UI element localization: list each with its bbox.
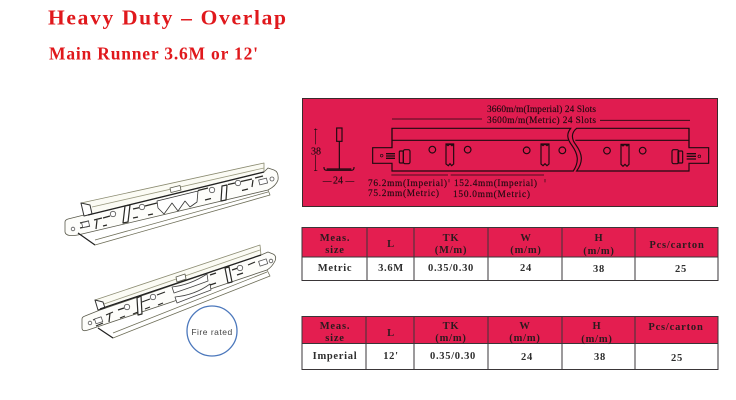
dimension labels: 152.4mm(Imperial) — [454, 178, 537, 189]
table: imperial: 25 — [671, 353, 683, 364]
table: metric: 24 — [520, 263, 532, 274]
icon: runner cross section — [314, 128, 354, 182]
rail — [81, 163, 264, 215]
fire rated badge — [187, 306, 237, 356]
table: metric: Metric — [318, 263, 352, 274]
table: imperial: (m/m) — [509, 333, 541, 344]
table: metric: 0.35/0.30 — [428, 263, 474, 274]
slots and holes — [93, 262, 255, 326]
table: metric: size — [325, 245, 345, 256]
table: imperial: TK — [443, 321, 459, 332]
table: imperial: Imperial — [313, 351, 357, 362]
dimension arrows — [391, 119, 690, 182]
table: imperial: 38 — [594, 352, 606, 363]
table: metric: L — [387, 239, 395, 250]
table: imperial: (m/m) — [435, 333, 467, 344]
table: metric: (m/m) — [510, 245, 542, 256]
table: imperial: Pcs/carton — [648, 322, 704, 333]
table: metric: (m/m) — [583, 246, 615, 257]
dimension labels — [311, 104, 596, 200]
flange — [78, 190, 270, 245]
table: imperial: (m/m) — [581, 334, 613, 345]
table: imperial: Meas. — [320, 321, 350, 332]
table: imperial: 12' — [383, 351, 399, 362]
panel: dimension drawing — [302, 98, 718, 206]
dimension labels: 75.2mm(Metric) — [368, 188, 439, 199]
table: imperial: 24 — [521, 352, 533, 363]
table: metric: 25 — [675, 264, 687, 275]
table: imperial: L — [387, 328, 395, 339]
dimension labels: 24 — [333, 176, 343, 186]
table: metric: Pcs/carton — [649, 240, 705, 251]
wave cut-out — [157, 191, 198, 214]
dimension labels: 3660m/m(Imperial) 24 Slots — [487, 104, 596, 115]
table: imperial — [302, 316, 718, 370]
runner elevation: left part — [373, 128, 577, 171]
flange — [98, 270, 270, 338]
fire rated lens cut-outs — [172, 274, 211, 303]
illustration: fire rated runner — [82, 245, 276, 338]
dimension labels: 38 — [311, 146, 321, 158]
table: imperial: W — [519, 321, 531, 332]
table: metric: 38 — [593, 264, 605, 275]
dimension labels: 150.0mm(Metric) — [453, 189, 530, 200]
dimension labels: 76.2mm(Imperial) — [368, 178, 447, 189]
plate — [82, 252, 276, 331]
table: imperial: 0.35/0.30 — [430, 351, 476, 362]
table: metric: TK — [443, 233, 459, 244]
rail — [95, 245, 261, 309]
subtitle: Main Runner 3.6M or 12' — [49, 44, 258, 64]
table: metric: (M/m) — [435, 245, 467, 256]
table: metric: 3.6M — [378, 263, 404, 274]
slots and holes — [80, 176, 263, 229]
table: metric — [302, 227, 718, 281]
title: Heavy Duty – Overlap — [48, 6, 286, 30]
table: imperial: H — [593, 321, 601, 332]
runner elevation: right part — [572, 128, 709, 171]
fire rated badge: Fire rated — [191, 327, 233, 337]
table: metric: H — [595, 233, 603, 244]
table: metric: W — [520, 233, 532, 244]
plate — [65, 168, 278, 236]
illustration: main runner — [65, 163, 278, 245]
table: imperial: size — [325, 333, 345, 344]
table: metric: Meas. — [320, 233, 350, 244]
dimension labels: 3600m/m(Metric) 24 Slots — [487, 115, 596, 126]
